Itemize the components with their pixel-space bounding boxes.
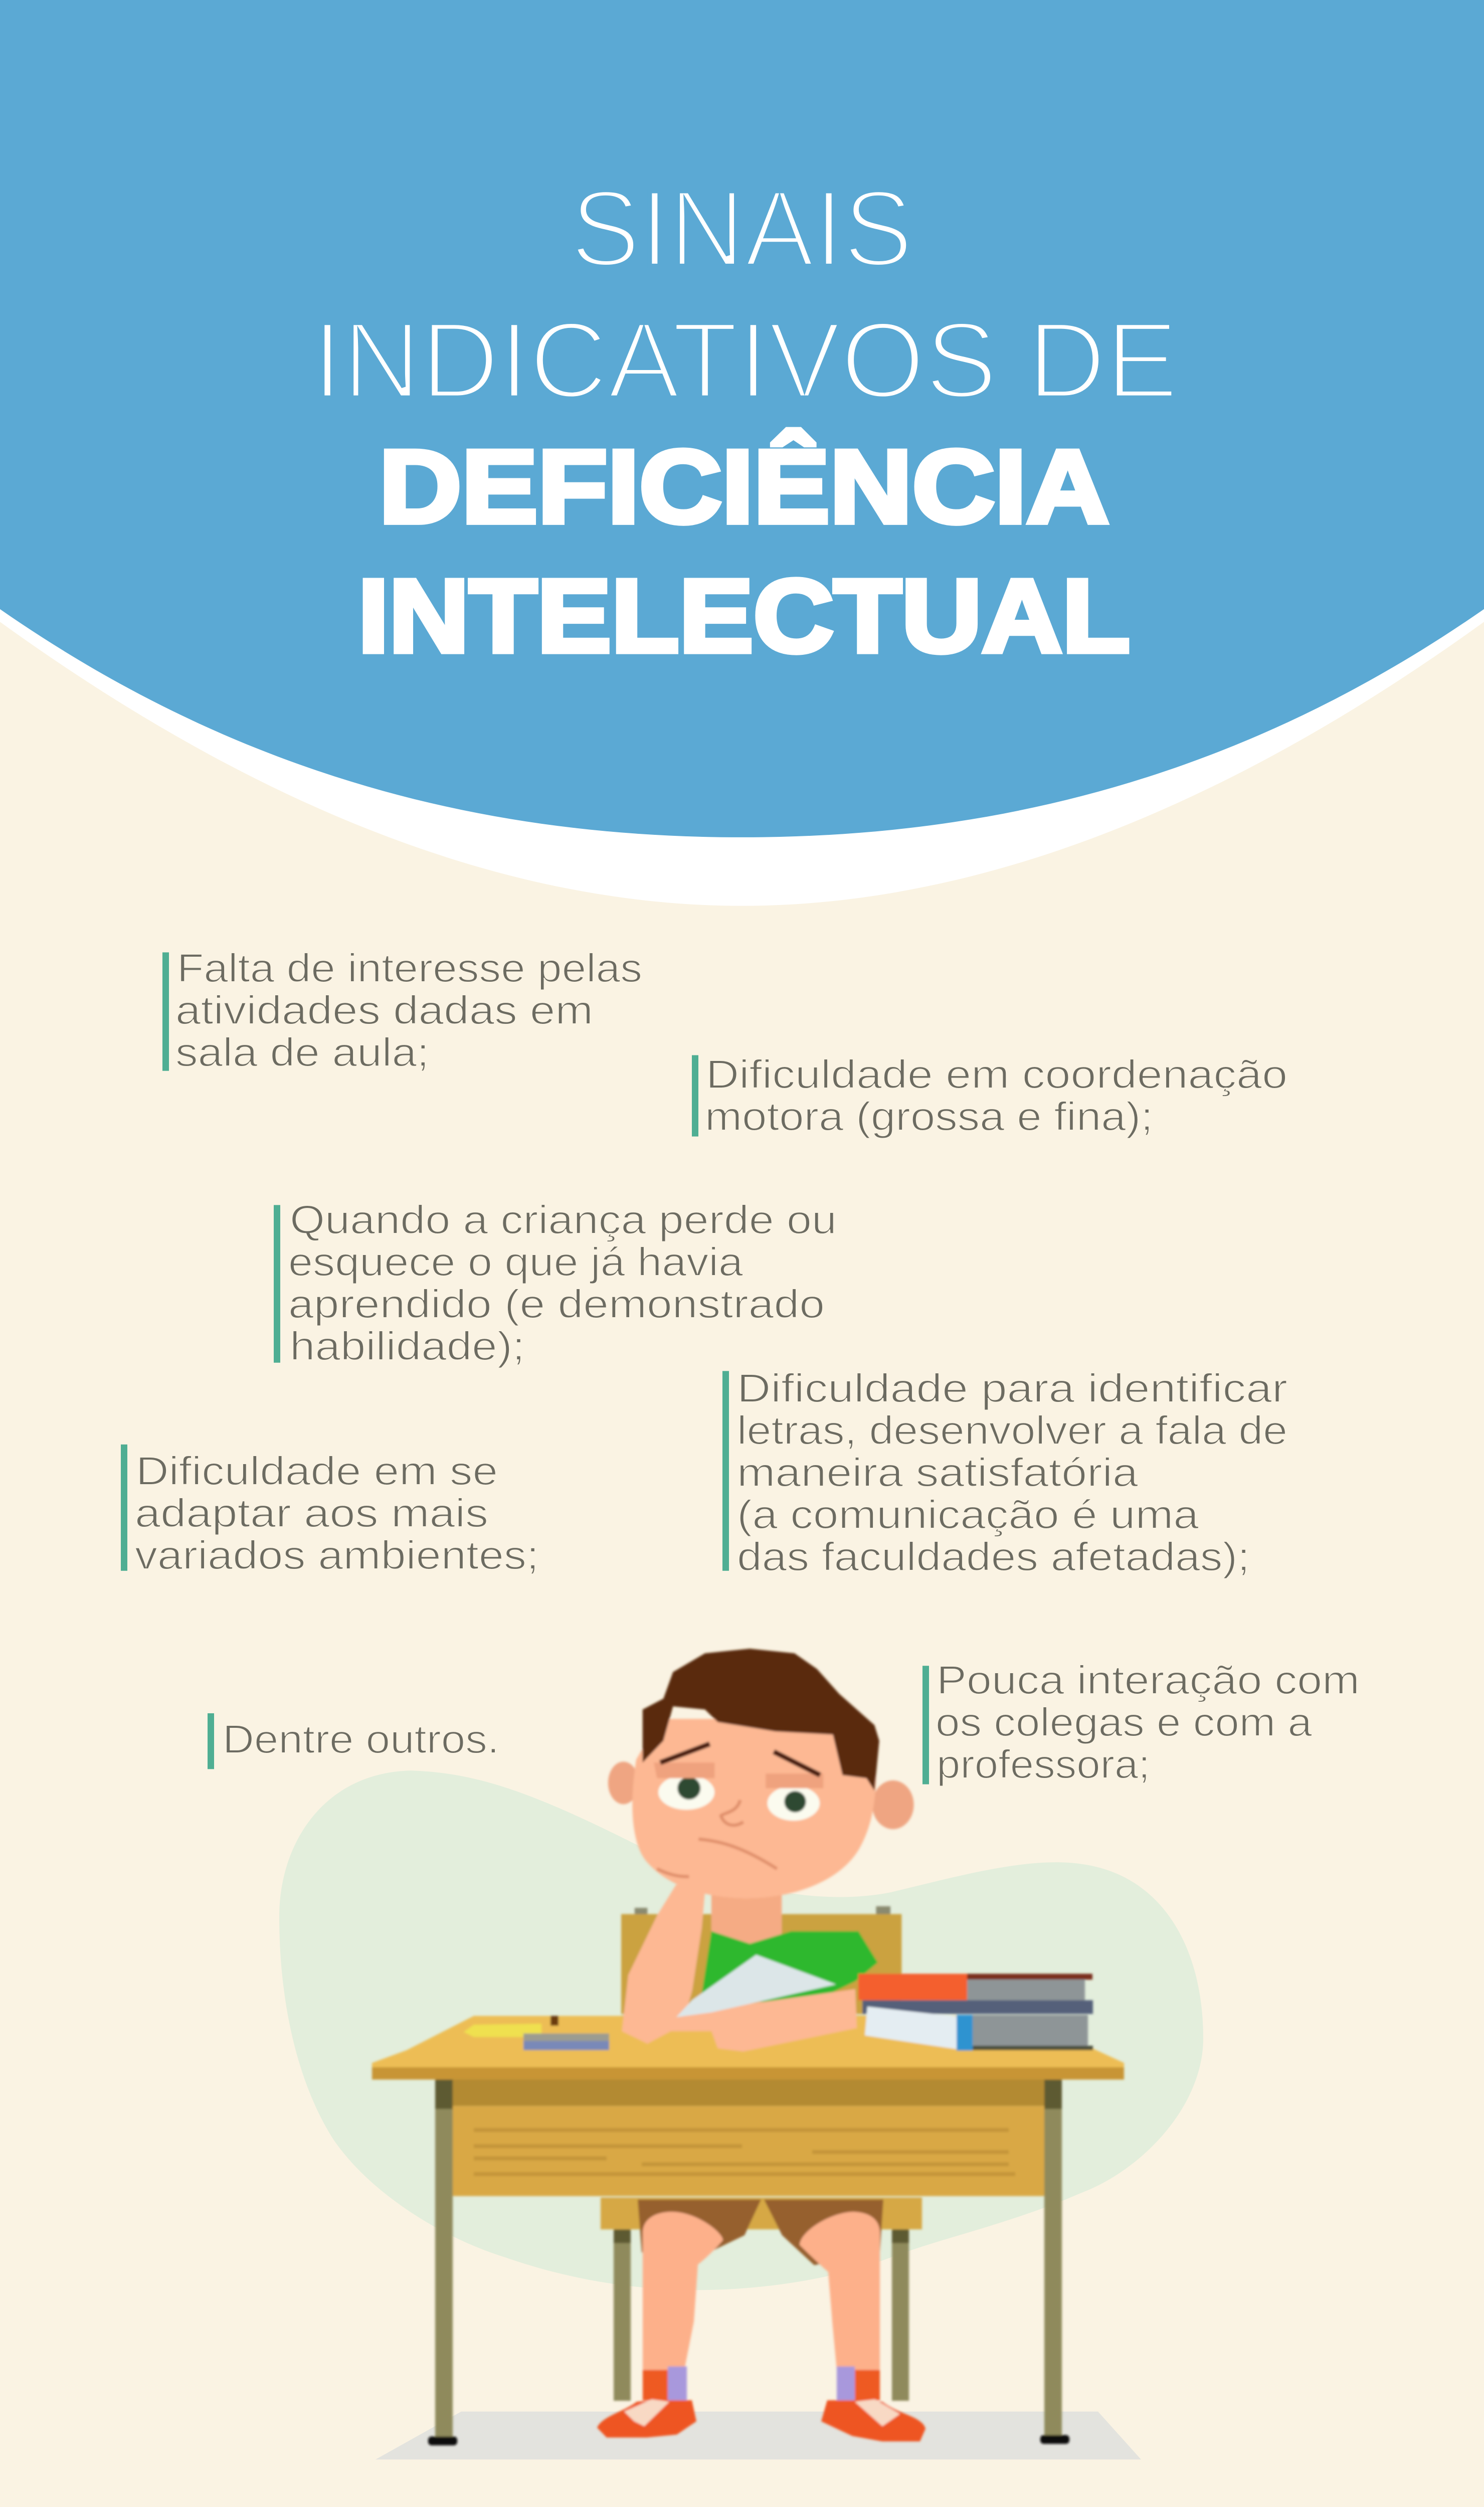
text block: coordenação motora: Dificuldade em coordenação (706, 1052, 1287, 1097)
stack of books (858, 1974, 1093, 2051)
text block: identificar letras: letras, desenvolver a fala de (737, 1408, 1287, 1453)
chair back (621, 1906, 901, 2053)
head (608, 1649, 914, 1944)
text block: adaptar ambientes: Dificuldade em se (136, 1449, 498, 1494)
title: INDICATIVOS DE (312, 299, 1178, 421)
text block: coordenação motora: motora (grossa e fina); (705, 1095, 1153, 1139)
text block: identificar letras: (a comunicação é uma (737, 1493, 1199, 1537)
text block: identificar letras: maneira satisfatória (737, 1451, 1139, 1495)
text block: identificar letras: Dificuldade para identificar (737, 1366, 1287, 1411)
text block: perda de habilidade: habilidade); (290, 1324, 525, 1369)
text block: perda de habilidade: aprendido (e demonstrado (288, 1282, 825, 1327)
text block: adaptar ambientes (121, 1445, 539, 1578)
floor shadow (376, 2412, 1141, 2459)
chair legs and seat (601, 2198, 922, 2401)
text block: pouca interação: professora; (937, 1742, 1150, 1787)
text block: adaptar ambientes: variados ambientes; (135, 1533, 539, 1578)
text block: identificar letras: das faculdades afetadas); (737, 1535, 1250, 1579)
title: SINAIS (571, 168, 913, 289)
text block: falta de interesse: Falta de interesse pelas (177, 946, 642, 991)
desk items (464, 2016, 609, 2050)
sneakers (597, 2367, 925, 2441)
text block: adaptar ambientes: adaptar aos mais (135, 1491, 488, 1536)
text block: falta de interesse: sala de aula; (175, 1030, 429, 1075)
text block: perda de habilidade: Quando a criança perde ou (290, 1198, 837, 1242)
nose and mouth (657, 1800, 777, 1877)
text block: identificar letras (722, 1366, 1287, 1579)
text block: falta de interesse (162, 946, 642, 1075)
text block: perda de habilidade: esquece o que já havia (288, 1240, 744, 1285)
title (312, 168, 1178, 674)
illustration: boy at desk (372, 1649, 1124, 2445)
desk (372, 2016, 1124, 2196)
text block: pouca interação: Pouca interação com (937, 1658, 1360, 1703)
text block: pouca interação: os colegas e com a (936, 1700, 1313, 1745)
text block: perda de habilidade (274, 1198, 837, 1369)
title: DEFICIÊNCIA (379, 429, 1109, 545)
legs and shorts (638, 2200, 883, 2370)
title: INTELECTUAL (358, 558, 1130, 674)
arms, shirt and paper plane (622, 1884, 878, 2052)
text block: falta de interesse: atividades dadas em (175, 988, 593, 1033)
text block: coordenação motora (692, 1052, 1287, 1139)
text block: dentre outros: Dentre outros. (223, 1717, 499, 1762)
background blob (279, 1770, 1203, 2290)
text block: pouca interação (922, 1658, 1360, 1787)
desk legs (428, 2079, 1069, 2445)
eyes (654, 1744, 823, 1821)
panel: header (0, 0, 1484, 906)
